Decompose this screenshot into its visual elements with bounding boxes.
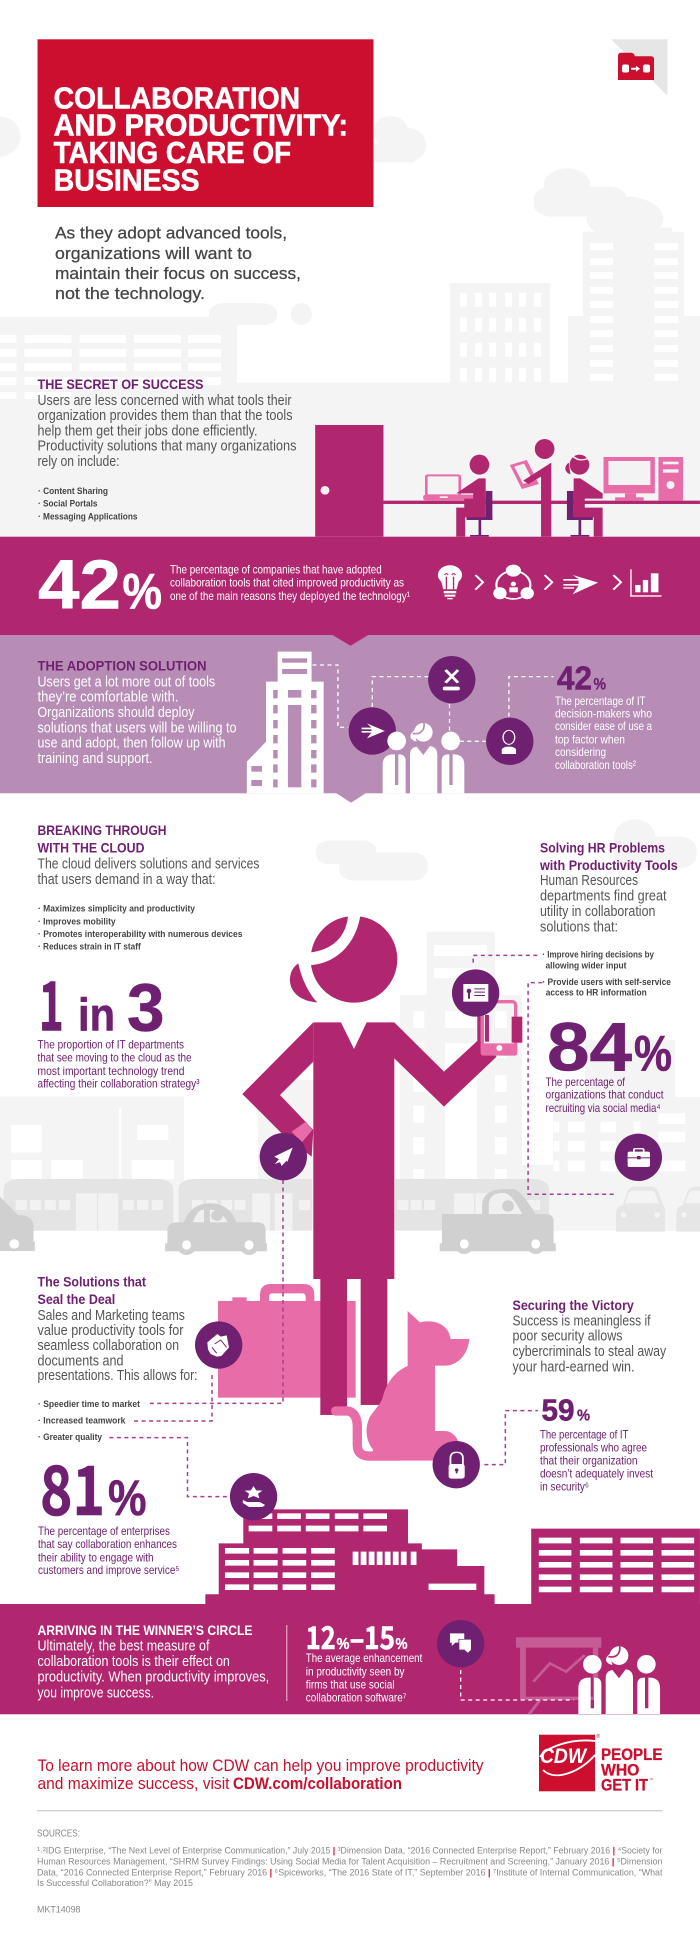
panel: arriving in the winner's circle <box>0 1604 700 1714</box>
caption <box>540 1427 654 1493</box>
title: TAKING CARE OF <box>54 135 291 170</box>
icon: standing worker <box>523 439 554 537</box>
bullet list: · Provide users with self-service <box>542 977 671 988</box>
stat: 12 to 15 percent: 12 <box>306 1613 336 1658</box>
panel: solving HR problems <box>539 839 678 1115</box>
panel: adoption solution background <box>0 635 700 803</box>
bullet list: · Improves mobility <box>38 916 116 927</box>
stat: 42 percent decision-makers: The percentage of IT <box>555 694 646 708</box>
icon: folder corner badge <box>611 39 667 96</box>
caption: most important technology trend <box>38 1064 184 1078</box>
icon: three people <box>383 723 464 793</box>
body text: they’re comfortable with. <box>38 689 178 706</box>
stat: 12 to 15 percent: 15 <box>364 1613 395 1658</box>
call to action: CDW.com/collaboration <box>233 1774 402 1793</box>
panel: the secret of success text <box>38 376 296 523</box>
stat: 42 percent decision-makers: 42 <box>557 659 592 696</box>
icon: laptop <box>423 475 476 500</box>
stat: 42 percent decision-makers: collaboration tools² <box>555 758 636 772</box>
stat: 42 percent decision-makers: top factor when <box>555 732 625 746</box>
body text: Success is meaningless if <box>512 1312 651 1329</box>
caption: in security⁶ <box>540 1479 589 1493</box>
stat: 84 percent: % <box>634 1026 672 1082</box>
caption: doesn’t adequately invest <box>540 1466 654 1480</box>
heading <box>38 1274 146 1307</box>
bullet list: access to HR information <box>546 988 647 999</box>
title: BUSINESS <box>54 162 200 197</box>
panel: breaking through with the cloud <box>38 822 260 1091</box>
sources footnotes: Human Resources Management, “SHRM Survey Findings: Using Social Media for Talent Acquisition – Recruitment and Screening,” January 2016 | ⁵Dimension <box>37 1856 662 1867</box>
title panel <box>38 39 374 207</box>
bullet list: · Messaging Applications <box>38 512 138 523</box>
caption <box>38 1524 180 1577</box>
stat: 59 percent: 59 <box>542 1393 574 1428</box>
stat: 81 percent: 81 <box>40 1436 105 1535</box>
stat: 42 percent decision-makers <box>555 659 652 772</box>
intro text: not the technology. <box>55 284 205 303</box>
sources footnotes <box>37 1829 663 1916</box>
bullet list: · Speedier time to market <box>38 1399 141 1410</box>
body text: The cloud delivers solutions and services <box>38 855 260 872</box>
bullet list <box>38 486 138 523</box>
bullet list: · Promotes interoperability with numerous devices <box>38 929 242 940</box>
body text: solutions that: <box>540 919 618 936</box>
stat: 81 percent: % <box>108 1470 146 1526</box>
intro text: organizations will want to <box>55 244 252 263</box>
body text: your hard-earned win. <box>512 1359 634 1376</box>
panel: securing the victory <box>512 1297 666 1493</box>
heading: Securing the Victory <box>512 1297 634 1313</box>
body text: productivity. When productivity improves, <box>38 1669 269 1686</box>
body text <box>38 392 296 470</box>
body text: value productivity tools for <box>38 1322 184 1339</box>
icon: ID card circle <box>452 969 499 1017</box>
big number: % <box>122 563 162 619</box>
body text <box>38 1638 269 1701</box>
logo: CDW People Who Get It: PEOPLE <box>601 1745 662 1764</box>
big number: 42 <box>38 545 121 623</box>
body text <box>38 855 260 888</box>
stat: 1 in 3 <box>39 952 164 1051</box>
stat: 84 percent: 84 <box>547 1009 632 1086</box>
big number <box>38 545 162 623</box>
caption: collaboration tools that cited improved productivity as <box>170 576 404 590</box>
intro text: maintain their focus on success, <box>55 264 301 283</box>
body text: that users demand in a way that: <box>38 871 216 888</box>
body text <box>512 1312 666 1376</box>
bullet list: allowing wider input <box>546 961 627 972</box>
body text: Sales and Marketing teams <box>38 1307 185 1324</box>
heading: ARRIVING IN THE WINNER’S CIRCLE <box>38 1622 252 1638</box>
heading <box>539 839 678 873</box>
heading: WITH THE CLOUD <box>38 839 144 855</box>
body text: utility in collaboration <box>540 903 655 920</box>
bullet list <box>38 903 242 953</box>
icon: three people team <box>578 1646 660 1714</box>
call to action: To learn more about how CDW can help you improve productivity <box>38 1756 484 1775</box>
caption: affecting their collaboration strategy³ <box>38 1077 200 1091</box>
call to action <box>38 1756 484 1793</box>
intro text: As they adopt advanced tools, <box>55 224 287 243</box>
caption: The percentage of enterprises <box>38 1524 170 1538</box>
illustration: magenta city base <box>0 1509 700 1633</box>
illustration: pink cat <box>336 1311 469 1461</box>
caption: recruiting via social media⁴ <box>546 1101 660 1115</box>
stat: 12 to 15 percent <box>306 1613 408 1658</box>
icon: phone in hand <box>477 1002 522 1056</box>
stat: 12 to 15 percent: – <box>350 1621 364 1656</box>
caption: The percentage of IT <box>540 1427 629 1441</box>
background: middle city skyline with buses and cars <box>0 819 700 1255</box>
body text <box>38 674 236 767</box>
heading: Seal the Deal <box>38 1291 115 1307</box>
connector lines: dashed paths <box>109 955 615 1497</box>
bullet list: · Maximizes simplicity and productivity <box>38 903 196 914</box>
bullet list <box>542 950 671 999</box>
caption: that see moving to the cloud as the <box>38 1051 192 1065</box>
body text: collaboration tools is their effect on <box>38 1653 230 1670</box>
caption: The average enhancement <box>306 1651 423 1665</box>
title: COLLABORATION <box>54 80 300 115</box>
sources footnotes: Is Successful Collaboration?” May 2015 <box>37 1878 193 1889</box>
icon: handshake circle <box>195 1321 242 1369</box>
icon: bracelet <box>292 1122 312 1143</box>
illustration: businesswoman figure <box>242 913 522 1415</box>
stat: 1 in 3: in <box>78 989 115 1041</box>
body text: departments find great <box>540 888 667 905</box>
body text <box>38 1307 198 1384</box>
panel: solutions that seal the deal <box>38 1274 198 1577</box>
body text: presentations. This allows for: <box>38 1367 198 1384</box>
bullet list: · Improve hiring decisions by <box>542 950 655 961</box>
stat: 84 percent <box>547 1009 672 1086</box>
bullet list: · Content Sharing <box>38 486 108 497</box>
caption: The percentage of <box>546 1075 626 1089</box>
caption <box>546 1075 664 1115</box>
body text: Users are less concerned with what tools their <box>38 392 292 409</box>
body text: help them get their jobs done efficiently. <box>38 422 258 439</box>
caption: professionals who agree <box>540 1440 647 1454</box>
caption <box>170 562 410 603</box>
stat: 12 to 15 percent: % <box>336 1636 350 1653</box>
icon: headset circle <box>486 718 533 765</box>
body text: you improve success. <box>38 1684 154 1701</box>
icon: computer monitor and tower <box>604 457 683 501</box>
icon: tools circle <box>428 656 475 703</box>
caption: The percentage of companies that have adopted <box>170 562 382 576</box>
panel: 42 percent band <box>0 537 700 646</box>
caption: collaboration software⁷ <box>306 1691 406 1705</box>
bullet list: · Greater quality <box>38 1432 103 1443</box>
caption: that their organization <box>540 1454 638 1468</box>
stat: 42 percent decision-makers: considering <box>555 745 606 759</box>
caption: in productivity seen by <box>306 1665 404 1679</box>
stat: 42 percent decision-makers: % <box>594 674 606 693</box>
heading <box>38 822 166 855</box>
icon: paper plane circle <box>260 1133 307 1180</box>
logo: CDW People Who Get It: CDW <box>540 1745 588 1768</box>
heading: THE SECRET OF SUCCESS <box>38 376 204 392</box>
caption: customers and improve service⁵ <box>38 1563 180 1577</box>
body text: Users get a lot more out of tools <box>38 674 215 691</box>
logo: CDW People Who Get It <box>539 1733 662 1795</box>
body text: seamless collaboration on <box>38 1337 179 1354</box>
icon: padlock circle <box>433 1441 480 1488</box>
illustration: briefcase <box>218 1284 356 1398</box>
caption: organizations that conduct <box>546 1088 664 1102</box>
stat: 1 in 3: 1 <box>39 952 64 1051</box>
caption <box>38 1038 200 1091</box>
stat: 42 percent decision-makers: decision-makers who <box>555 706 652 720</box>
icon: background cars <box>0 1189 556 1255</box>
bullet list <box>38 1399 141 1443</box>
body text: Organizations should deploy <box>38 704 195 721</box>
bullet list: · Reduces strain in IT staff <box>38 942 141 953</box>
icons: process sequence <box>438 565 662 599</box>
heading: THE ADOPTION SOLUTION <box>38 658 206 674</box>
caption: that say collaboration enhances <box>38 1537 177 1551</box>
caption: their ability to engage with <box>38 1550 154 1564</box>
body text: documents and <box>38 1352 124 1369</box>
sources footnotes: SOURCES: <box>37 1829 80 1840</box>
panel: adoption solution content <box>38 652 652 793</box>
caption: one of the main reasons they deployed the technology¹ <box>170 589 410 603</box>
body text <box>540 872 667 936</box>
call to action: and maximize success, visit <box>38 1774 230 1793</box>
logo: CDW People Who Get It: ® <box>596 1733 600 1740</box>
icon: tablet <box>510 460 539 489</box>
logo: CDW People Who Get It: WHO <box>601 1761 639 1780</box>
sources footnotes: Data, “2016 Connected Enterprise Report,” February 2016 | ⁶Spiceworks, “The 2016 State of IT,” September 2016 | ⁷Institute of Internal Communication, “What <box>37 1867 663 1878</box>
title: AND PRODUCTIVITY: <box>54 108 348 143</box>
stat: 59 percent: % <box>577 1408 590 1425</box>
sources footnotes: MKT14098 <box>37 1905 80 1916</box>
stat: 1 in 3: 3 <box>127 970 164 1046</box>
body text: rely on include: <box>38 453 120 470</box>
illustration: office with door and desk workers <box>315 425 700 537</box>
logo: CDW People Who Get It: ™ <box>649 1777 653 1782</box>
stat: 42 percent decision-makers: consider ease of use a <box>555 719 652 733</box>
body text: use and adopt, then follow up with <box>38 735 226 752</box>
bullet list: · Social Portals <box>38 499 98 510</box>
logo: CDW People Who Get It: GET IT <box>601 1776 649 1795</box>
body text: training and support. <box>38 750 152 767</box>
background: upper city skyline <box>0 116 700 538</box>
caption <box>306 1651 423 1705</box>
body text: organization provides them than that the tools <box>38 407 292 424</box>
caption: firms that use social <box>306 1678 395 1692</box>
title <box>54 80 348 197</box>
caption: The proportion of IT departments <box>38 1038 184 1052</box>
illustration: building and connector lines <box>247 652 554 793</box>
intro text <box>55 224 301 303</box>
sources footnotes: ¹˒²IDG Enterprise, “The Next Level of Enterprise Communication,” July 2015 | ³Dimension Data, “2016 Connected Enterprise Report,” February 2016 | ⁴Society for <box>37 1845 662 1856</box>
illustration: presentation board <box>437 1620 601 1714</box>
icon: chat circle <box>437 1620 484 1667</box>
body text: Ultimately, the best measure of <box>38 1638 210 1655</box>
body text: poor security allows <box>512 1328 622 1345</box>
heading: Solving HR Problems <box>540 839 665 855</box>
icon: seated worker left <box>456 455 492 537</box>
bullet list: · Increased teamwork <box>38 1415 126 1426</box>
body text: Productivity solutions that many organizations <box>38 438 296 455</box>
body text: solutions that users will be willing to <box>38 719 236 736</box>
heading: The Solutions that <box>38 1274 146 1290</box>
icon: arrow circle <box>349 707 396 755</box>
icon: briefcase circle <box>615 1134 662 1181</box>
stat: 12 to 15 percent: % <box>396 1636 408 1653</box>
body text: Human Resources <box>540 872 638 889</box>
heading: BREAKING THROUGH <box>38 822 166 838</box>
icon: star in hand circle <box>230 1473 277 1520</box>
body text: cybercriminals to steal away <box>512 1343 666 1360</box>
heading: with Productivity Tools <box>539 857 678 873</box>
icon: seated worker right <box>565 455 603 537</box>
